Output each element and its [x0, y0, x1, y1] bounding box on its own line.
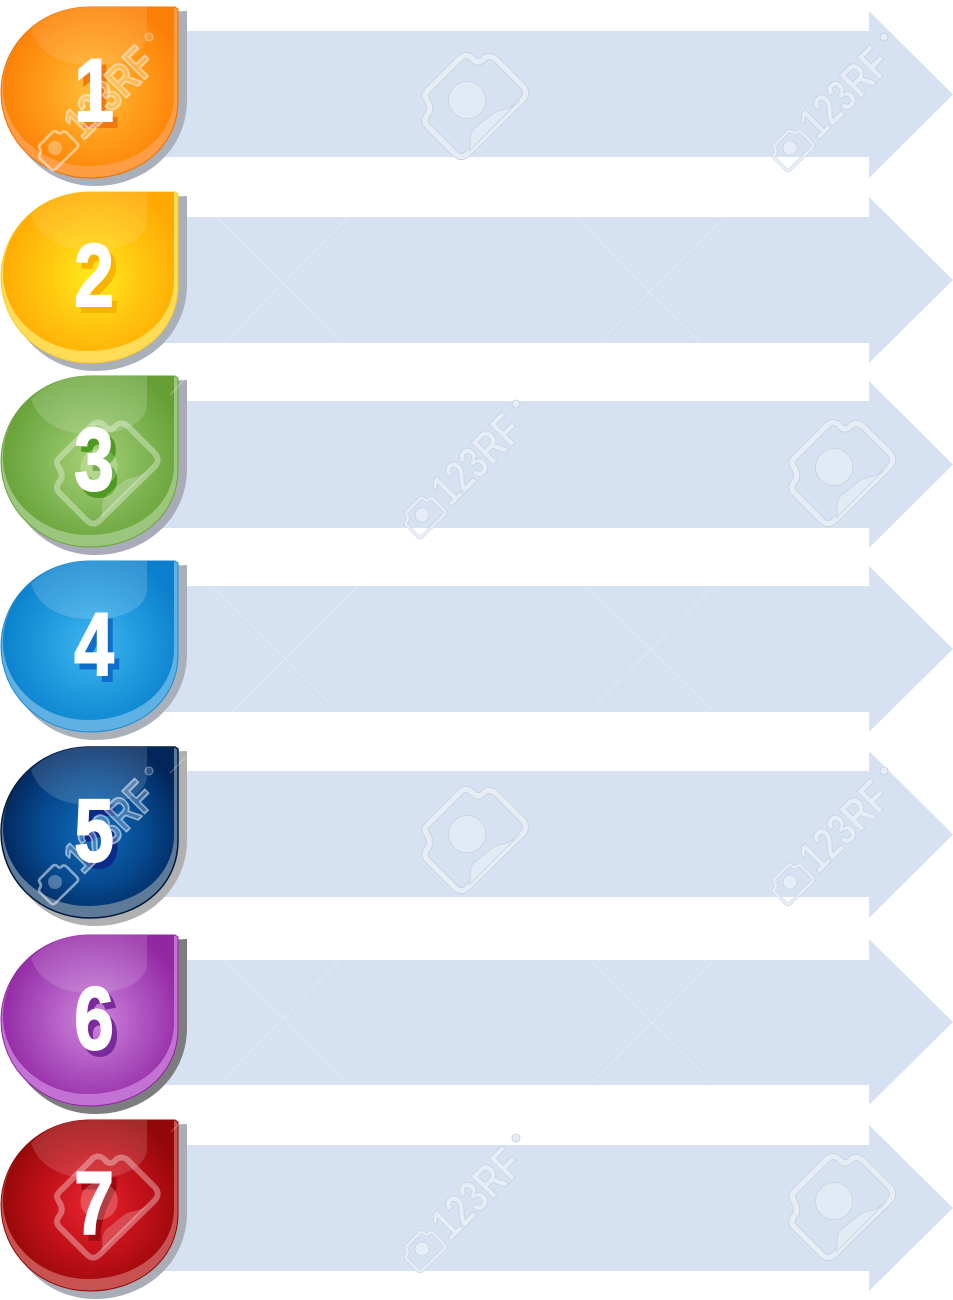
watermark: 123RF logo, arrow row 5: 123RF	[788, 770, 900, 882]
arrow 4	[150, 566, 953, 732]
watermark: 123RF logo, arrow row 3	[406, 400, 532, 537]
watermark: 123RF logo, badge 5: 123RF	[53, 770, 165, 882]
badge 6: 6	[79, 975, 119, 1075]
arrow 1	[150, 11, 953, 178]
badge 3: 3	[79, 416, 119, 516]
number 2: 2	[74, 226, 114, 326]
number 3: 3	[74, 410, 114, 510]
row 7	[1, 1120, 953, 1299]
badge 3	[1, 376, 187, 555]
badge 5: 5	[79, 787, 119, 887]
badge 2: 2	[79, 232, 119, 332]
arrow 7	[150, 1125, 953, 1291]
watermark: camera stamp, badge 7	[57, 1157, 158, 1258]
badge 7: 7	[79, 1160, 119, 1260]
row 1	[1, 7, 953, 186]
arrow 5	[150, 751, 953, 918]
badge 1: 1	[79, 47, 119, 147]
number 6: 6	[74, 969, 114, 1069]
watermark: 123RF logo, arrow row 7	[406, 1134, 532, 1271]
badge 4: 4	[79, 601, 119, 701]
watermark: 123RF logo, arrow row 3: 123RF	[420, 403, 532, 515]
row 6	[1, 935, 953, 1114]
row 3	[1, 376, 953, 555]
watermark: 123RF logo, arrow row 5	[774, 767, 900, 904]
watermark: camera stamp, arrow row 7	[792, 1157, 893, 1258]
watermark: 123RF logo, arrow row 7: 123RF	[420, 1137, 532, 1249]
badge 5	[1, 747, 187, 926]
watermark: camera stamp, badge 3	[57, 423, 158, 524]
number 7: 7	[74, 1154, 114, 1254]
arrow 2	[150, 197, 953, 363]
watermark: camera stamp, arrow row 5	[425, 790, 526, 891]
arrow 3	[150, 381, 953, 548]
badge 6	[1, 935, 187, 1114]
badge 4	[1, 561, 187, 740]
badge 1	[1, 7, 187, 186]
number 4: 4	[74, 595, 114, 695]
number 5: 5	[74, 781, 114, 881]
number 1: 1	[74, 41, 114, 141]
watermark: 123RF logo, badge 5	[39, 767, 165, 904]
watermark: camera stamp, arrow row 1	[425, 56, 526, 157]
watermark: 123RF logo, arrow row 1: 123RF	[788, 36, 900, 148]
badge 7	[1, 1120, 187, 1299]
watermark: camera stamp, arrow row 3	[792, 423, 893, 524]
row 4	[1, 561, 953, 740]
watermark: 123RF logo, badge 1	[39, 33, 165, 170]
watermark: 123RF logo, badge 1: 123RF	[53, 36, 165, 148]
badge 2	[1, 192, 187, 371]
row 2	[1, 192, 953, 371]
arrow 6	[150, 939, 953, 1105]
row 5	[1, 747, 953, 926]
watermark: 123RF logo, arrow row 1	[774, 33, 900, 170]
